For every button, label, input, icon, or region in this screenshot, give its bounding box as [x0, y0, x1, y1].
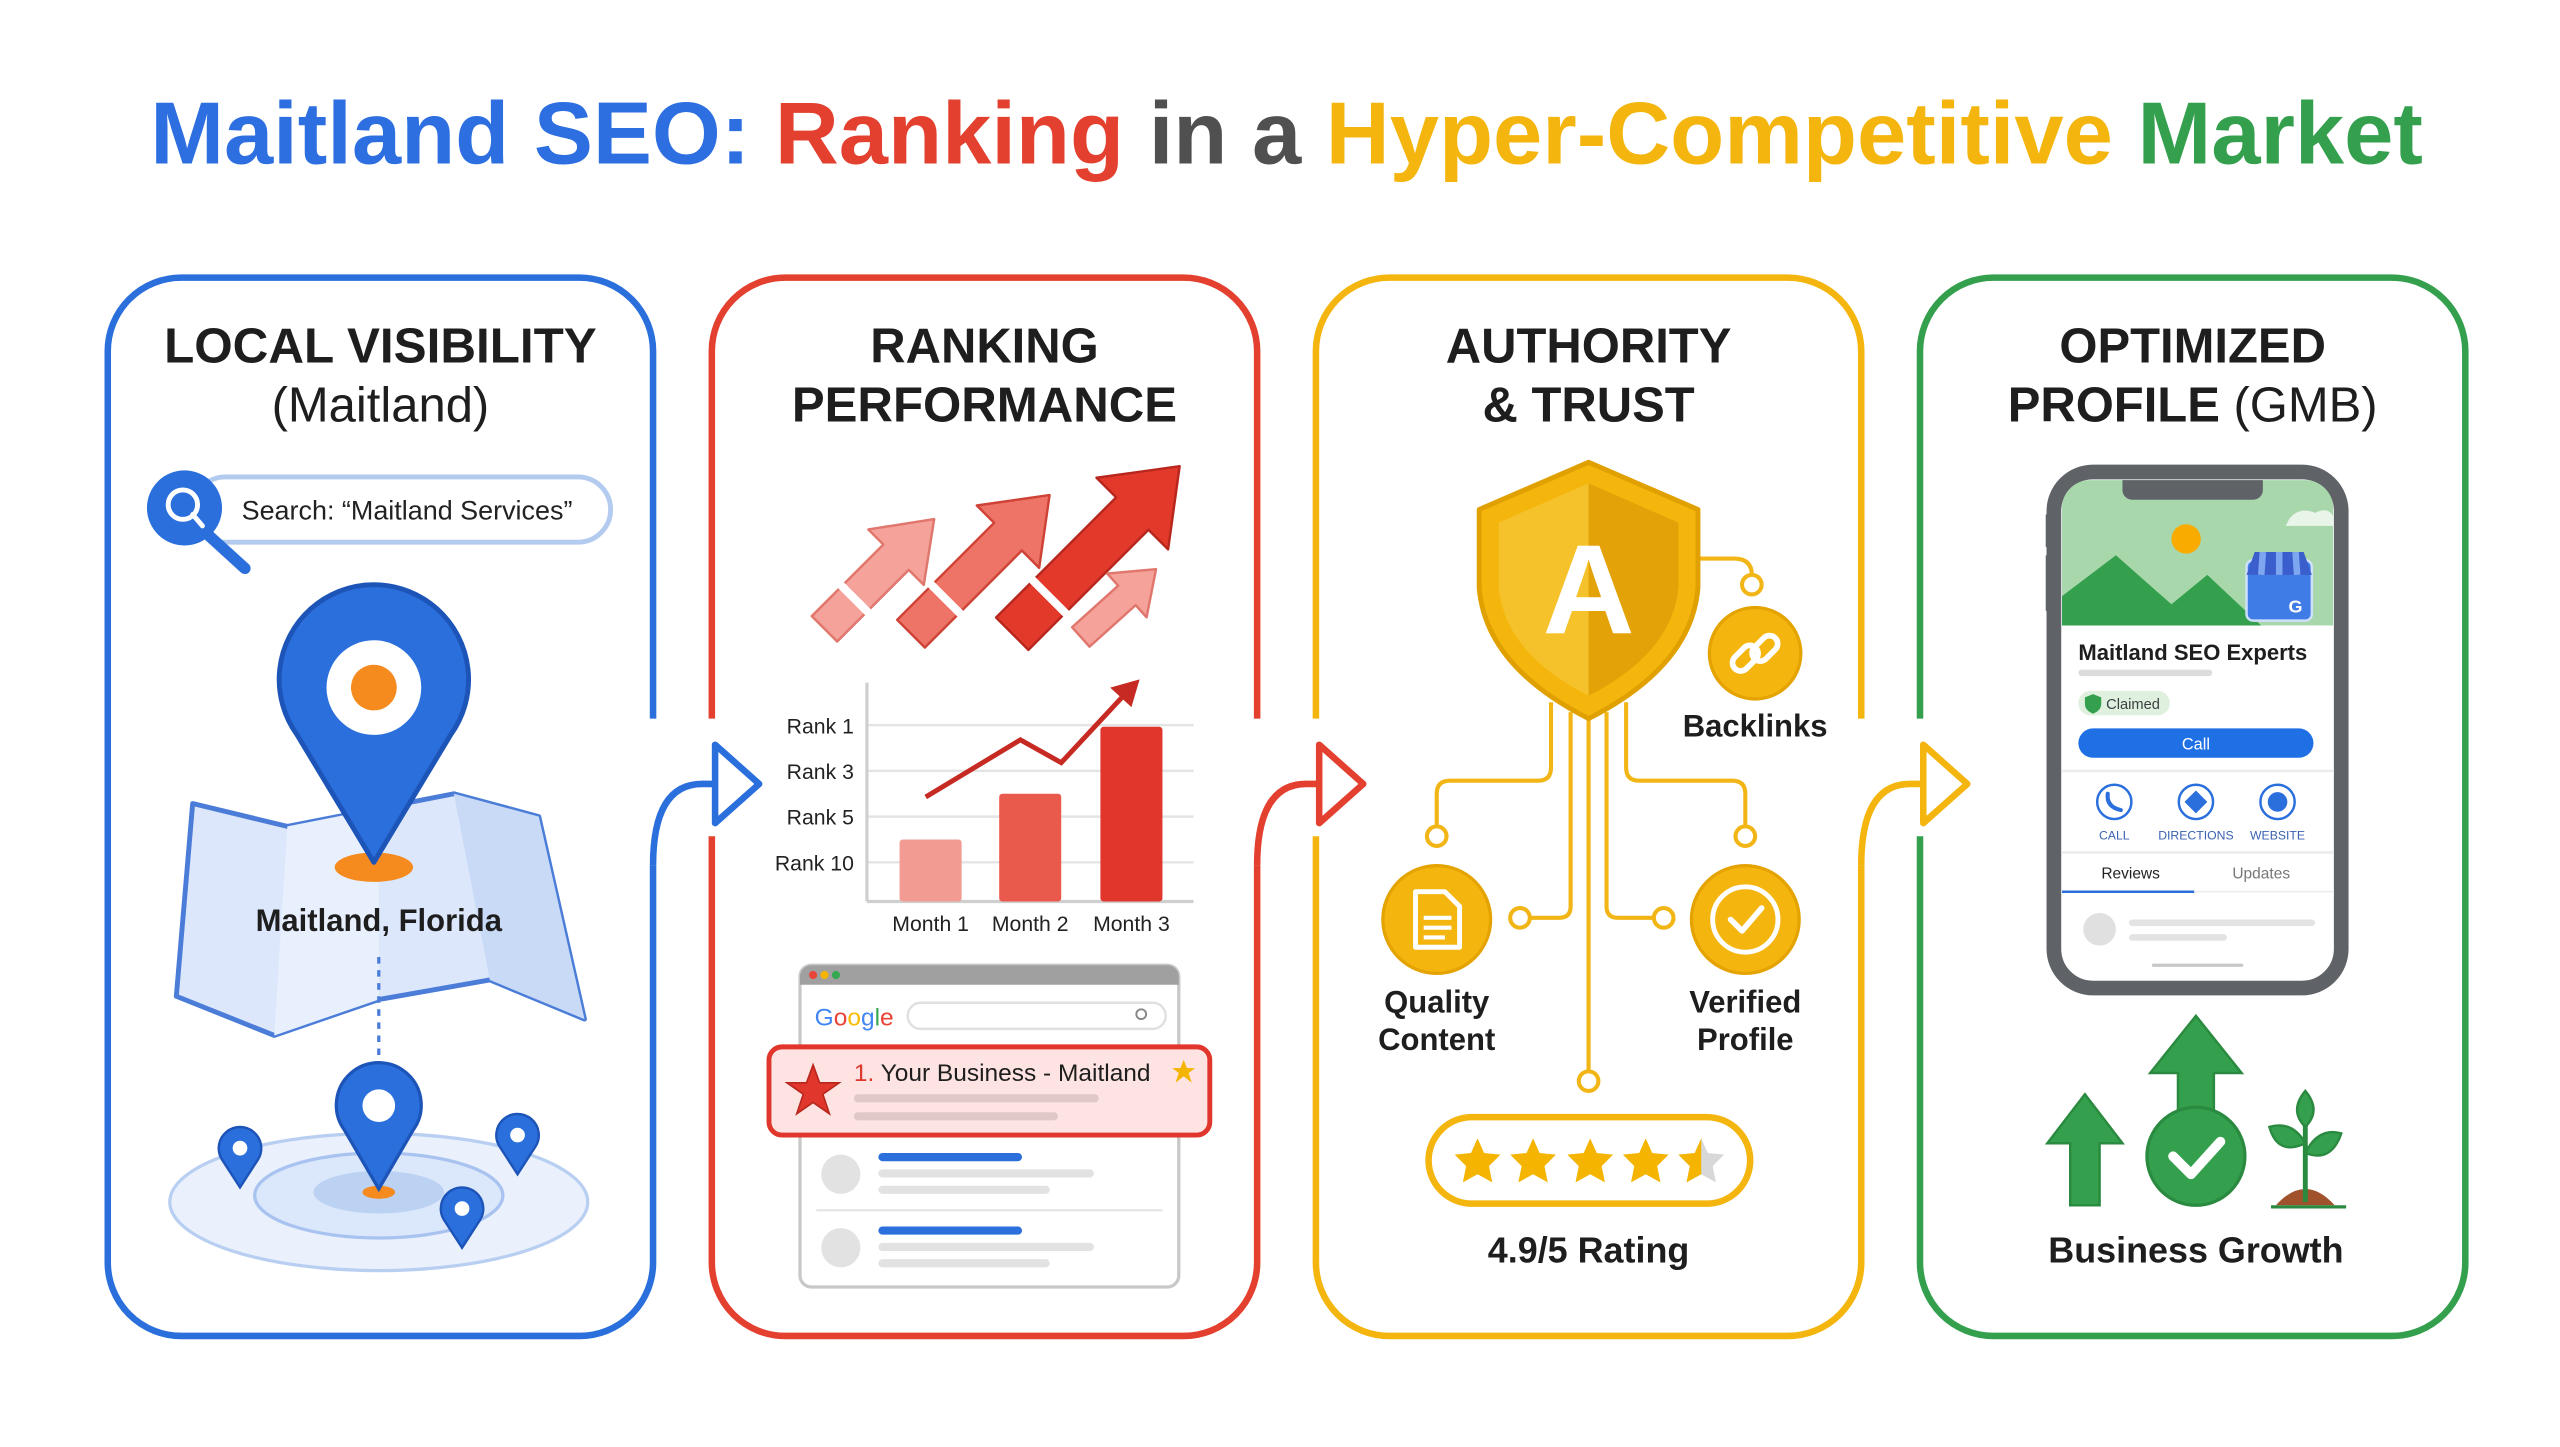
- action icons: WEBSITE: [2250, 828, 2305, 842]
- bar chart: rank by month: Rank 5: [787, 807, 854, 830]
- icon: shield with A: A: [1543, 519, 1635, 661]
- bar chart: rank by month: Month 3: [1093, 913, 1170, 936]
- phone mockup: Maitland SEO Experts: [2078, 640, 2307, 665]
- search results browser: [769, 965, 1210, 1287]
- rating stars: 4.9/5 Rating: [1488, 1229, 1689, 1270]
- icon: verified profile: Verified: [1689, 985, 1801, 1020]
- icon: shield with A: [1479, 462, 1698, 719]
- heading: ranking performance: RANKING: [870, 320, 1099, 374]
- search bar: [147, 470, 611, 568]
- action icons: DIRECTIONS: [2158, 828, 2234, 842]
- heading: optimized profile: [2008, 320, 2378, 432]
- action icons: [2097, 785, 2305, 842]
- heading: authority & trust: AUTHORITY: [1446, 320, 1731, 374]
- phone mockup: [2046, 472, 2348, 988]
- action icons: CALL: [2099, 828, 2130, 842]
- claimed badge: Claimed: [2106, 697, 2160, 713]
- bar chart: rank by month: Month 1: [892, 913, 969, 936]
- heading: ranking performance: PERFORMANCE: [792, 378, 1177, 432]
- bar chart: rank by month: Rank 3: [787, 761, 854, 784]
- icon: verified profile: Profile: [1697, 1022, 1794, 1057]
- heading: optimized profile: PROFILE (GMB): [2008, 378, 2378, 432]
- title: Maitland SEO: Ranking in a Hyper-Competitive Market: [150, 83, 2423, 182]
- bar chart: rank by month: Rank 10: [775, 852, 854, 875]
- highlighted top result: 1. Your Business - Maitland: [854, 1060, 1151, 1087]
- arrow: panel 1 to 2: [653, 745, 759, 866]
- bar chart: rank by month: Month 2: [992, 913, 1069, 936]
- tabs: [2062, 866, 2333, 892]
- icon: google business store: G: [2289, 596, 2302, 616]
- call button: Call: [2182, 736, 2210, 754]
- panel: local visibility: [108, 278, 653, 1336]
- heading: optimized profile: OPTIMIZED: [2059, 320, 2326, 374]
- icon: business growth: [2047, 1016, 2346, 1270]
- icon: quality content: [1378, 866, 1495, 1057]
- panel: authority & trust: [1316, 278, 1861, 1336]
- heading: authority & trust: & TRUST: [1482, 378, 1695, 432]
- bar chart: rank by month: Rank 1: [787, 715, 854, 738]
- icon: backlinks: [1683, 608, 1828, 744]
- heading: local visibility: (Maitland): [272, 378, 489, 432]
- icon: google business store: [2247, 552, 2312, 621]
- search bar: Search: “Maitland Services”: [242, 495, 572, 525]
- highlighted top result: [769, 1047, 1210, 1135]
- heading: local visibility: LOCAL VISIBILITY: [164, 320, 597, 374]
- map: [176, 794, 584, 1065]
- circuit lines: [1427, 559, 1762, 1091]
- rating stars: [1429, 1117, 1750, 1270]
- arrow: panel 2 to 3: [1257, 745, 1363, 866]
- icon: big location pin: [279, 585, 469, 882]
- heading: ranking performance: [792, 320, 1177, 432]
- panel: optimized profile: [1920, 278, 2465, 1336]
- panel: ranking performance: [712, 278, 1257, 1336]
- tabs: Reviews: [2101, 866, 2160, 883]
- radius map with pins: [170, 1063, 588, 1271]
- icon: backlinks: Backlinks: [1683, 709, 1828, 744]
- icon: rising arrows: [797, 430, 1215, 669]
- heading: authority & trust: [1446, 320, 1731, 432]
- icon: business growth: Business Growth: [2048, 1229, 2344, 1270]
- heading: local visibility: [164, 320, 597, 432]
- search results browser: Google: [815, 1005, 894, 1032]
- tabs: Updates: [2232, 866, 2290, 883]
- icon: quality content: Quality: [1384, 985, 1490, 1020]
- icon: quality content: Content: [1378, 1022, 1495, 1057]
- icon: verified profile: [1689, 866, 1801, 1057]
- call button: [2078, 728, 2313, 758]
- map: Maitland, Florida: [256, 903, 503, 938]
- bar chart: rank by month: [775, 679, 1193, 936]
- claimed badge: [2078, 691, 2170, 715]
- arrow: panel 3 to 4: [1861, 745, 1967, 866]
